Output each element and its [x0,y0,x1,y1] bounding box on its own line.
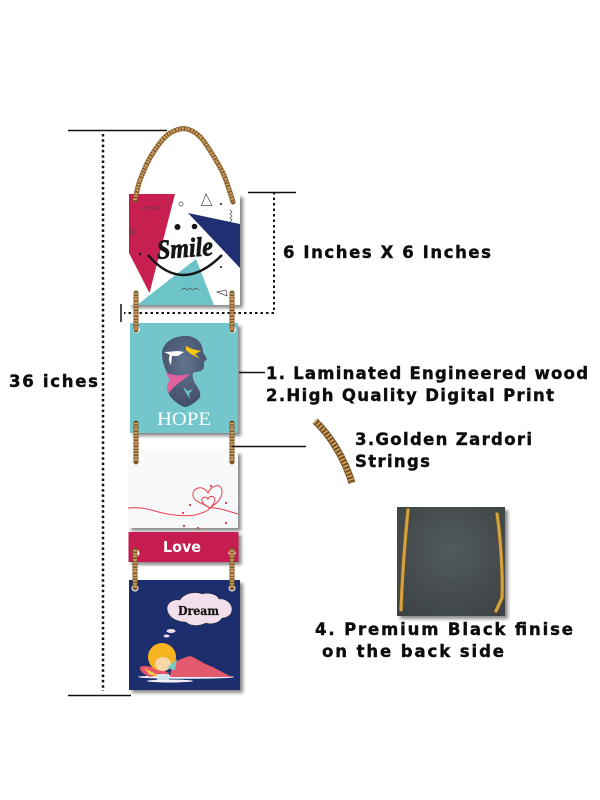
label: digital print: 2.High Quality Digital Print [266,386,554,405]
panel: smile [129,194,240,305]
label: laminated wood: 1. Laminated Engineered wood [266,364,588,383]
label: panel size: 6 Inches X 6 Inches [283,243,491,262]
label: black finish: 4. Premium Black finise [315,620,573,639]
ropes: golden strings [135,129,233,588]
icon: rope sample [315,421,352,483]
word: Smile: Smile [156,231,214,265]
label: golden strings: Strings [355,452,430,471]
teal bird [183,387,193,399]
label: black finish [315,620,573,661]
leader line: strings [232,446,306,448]
label: black finish: on the back side [322,642,504,661]
label: 36 inches: 36 iches [9,372,98,391]
panel: love heart [128,451,238,529]
smile curve [148,255,222,275]
word: Dream: Dream [178,604,219,618]
panel: love label: Love [163,538,201,556]
panel: back side [397,507,505,616]
dimension lines: panel size [121,192,296,322]
yellow bird [186,346,201,359]
pink scarf [165,372,190,393]
sleeping child [138,643,234,682]
panel: hope [130,323,238,433]
panel: dream [129,580,240,690]
label: golden strings [355,430,532,471]
back side strings [401,510,502,611]
head silhouette [162,336,207,407]
heart line art [128,486,238,516]
panel: love label [128,532,238,562]
thought bubble [167,593,232,626]
small decorative shapes [130,194,232,296]
leader line: laminated wood [239,372,265,374]
eyes [174,224,180,230]
dimension lines: total height [68,130,167,696]
label: golden strings: 3.Golden Zardori [355,430,532,449]
white bird [164,351,184,365]
word: HOPE: HOPE [157,409,211,430]
